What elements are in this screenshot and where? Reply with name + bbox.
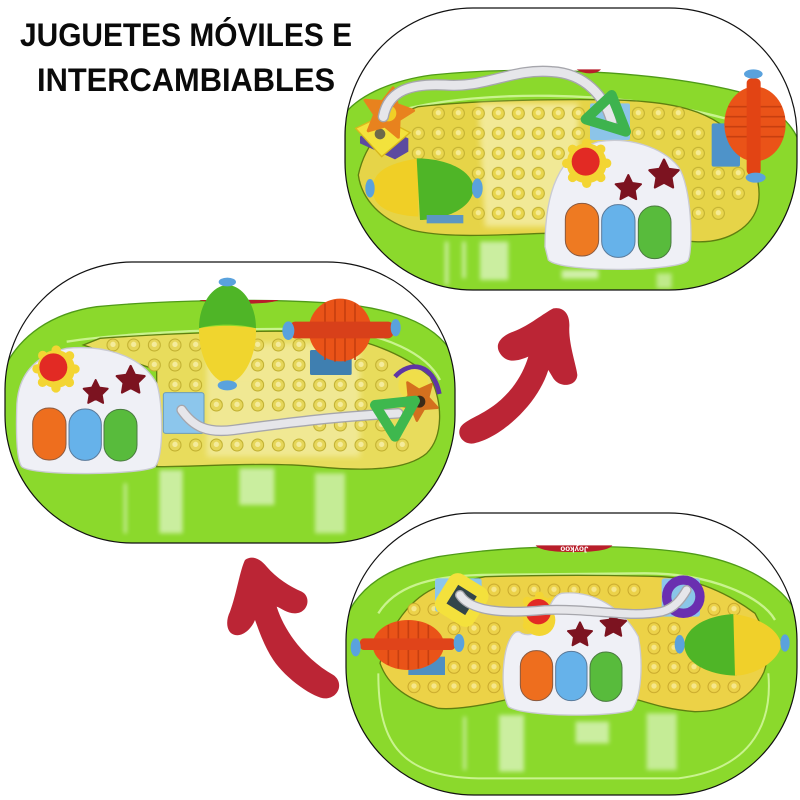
keyboard module [16,348,162,474]
floor reflections [124,468,345,533]
logo sliver [199,300,278,304]
panel outline [345,8,797,290]
icon: egg roller [675,614,790,676]
icon: orange roller [282,299,401,375]
floor reflections [463,713,677,772]
logo [536,545,612,552]
tray studs [404,580,744,696]
panel: bottom toy view [345,513,798,797]
icon: purple ring toy [667,580,700,613]
title [20,17,352,98]
icon: wire [182,410,398,431]
icon: egg roller [199,278,256,390]
icon: wire [460,590,687,614]
arrow: bottom to middle [227,558,339,698]
logo: Joykoo [560,544,588,553]
panel: middle toy view [0,262,457,547]
tray studs [408,103,748,223]
floor reflections [445,242,672,288]
icon: blue cube [163,393,204,433]
panel outline [346,513,797,795]
logo sliver [577,69,601,73]
icon: ring and diamond toys [356,83,417,159]
icon: triangle toy [586,95,626,132]
tray highlight [478,103,578,227]
title: JUGUETES MÓVILES E [20,17,352,53]
icon: yellow square toy [439,577,485,623]
title: INTERCAMBIABLES [37,62,335,98]
icon: blue post [590,103,630,140]
icon: wire arc [383,71,612,122]
icon: orange roller [712,69,786,183]
icon: egg roller [365,158,483,223]
tray highlight [207,343,360,457]
icon: star and ring toys [393,364,442,422]
panel: top toy view [345,8,798,300]
arrow: middle to top [459,308,577,444]
icon: orange roller [351,620,464,670]
keyboard module [503,593,641,715]
icon: triangle toy [375,401,415,437]
icon: blue posts [408,578,700,675]
keyboard module [545,140,691,269]
tray studs [103,335,413,455]
panel outline [5,262,455,543]
